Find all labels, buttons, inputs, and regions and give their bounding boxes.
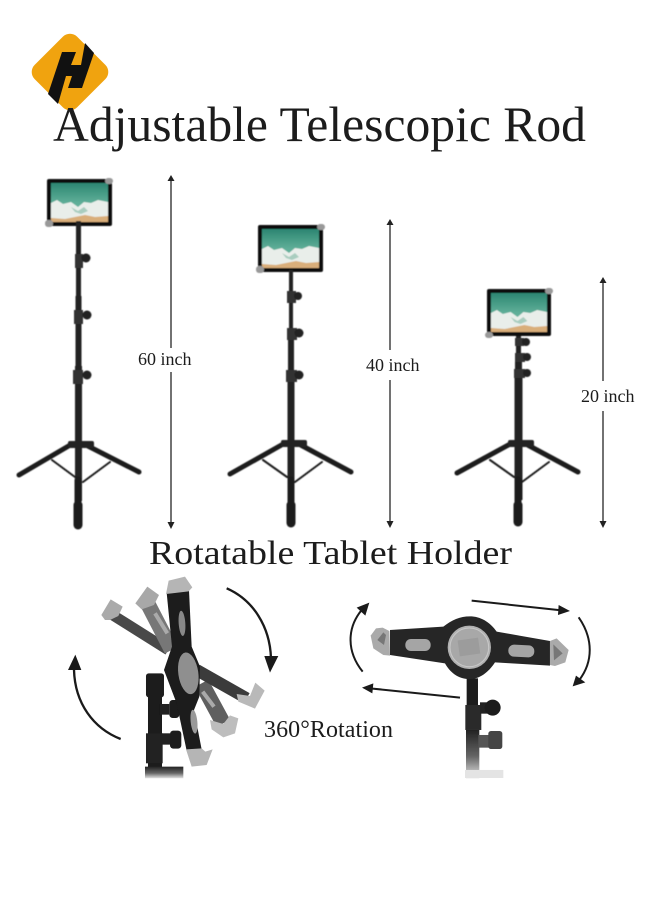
height arrow: 40 inch: [386, 219, 394, 528]
short stand: 20 inch: [457, 288, 578, 522]
arrow: clockwise: [227, 588, 278, 673]
holder body: [371, 616, 569, 679]
tripod legs: [457, 443, 578, 522]
telescopic pole: [514, 336, 522, 500]
label: 40 inch: 40 inch: [366, 355, 420, 375]
medium stand: 40 inch: [230, 224, 351, 523]
tablet: [485, 288, 553, 338]
rotation label: 360°Rotation: [264, 717, 393, 743]
horizontal holder photo: [351, 601, 590, 778]
tilted holder photo: [68, 577, 278, 778]
logo badge: [28, 30, 112, 114]
tall stand: 60 inch: [19, 178, 139, 525]
arrow: right curve: [573, 617, 590, 686]
tablet: [256, 224, 325, 273]
arrow: top right: [472, 601, 570, 615]
front arm: [164, 577, 213, 767]
mount pole: [465, 678, 503, 778]
label: 20 inch: 20 inch: [581, 386, 634, 406]
title: Adjustable Telescopic Rod: [53, 96, 586, 152]
height arrow: 60 inch: [168, 175, 174, 529]
telescopic pole: [75, 221, 82, 501]
arrow: counter-clockwise: [68, 655, 121, 739]
tablet: [45, 178, 113, 227]
label: 60 inch: 60 inch: [138, 349, 192, 369]
telescopic pole: [288, 270, 294, 500]
arrow: left curve: [351, 603, 369, 672]
tripod legs: [230, 443, 351, 523]
arrow: bottom left: [362, 683, 460, 698]
rear arms: [101, 587, 265, 737]
subheading: Rotatable Tablet Holder: [149, 535, 513, 572]
height arrow: 20 inch: [600, 277, 606, 528]
mount pole: [145, 673, 183, 778]
tripod legs: [19, 444, 139, 525]
